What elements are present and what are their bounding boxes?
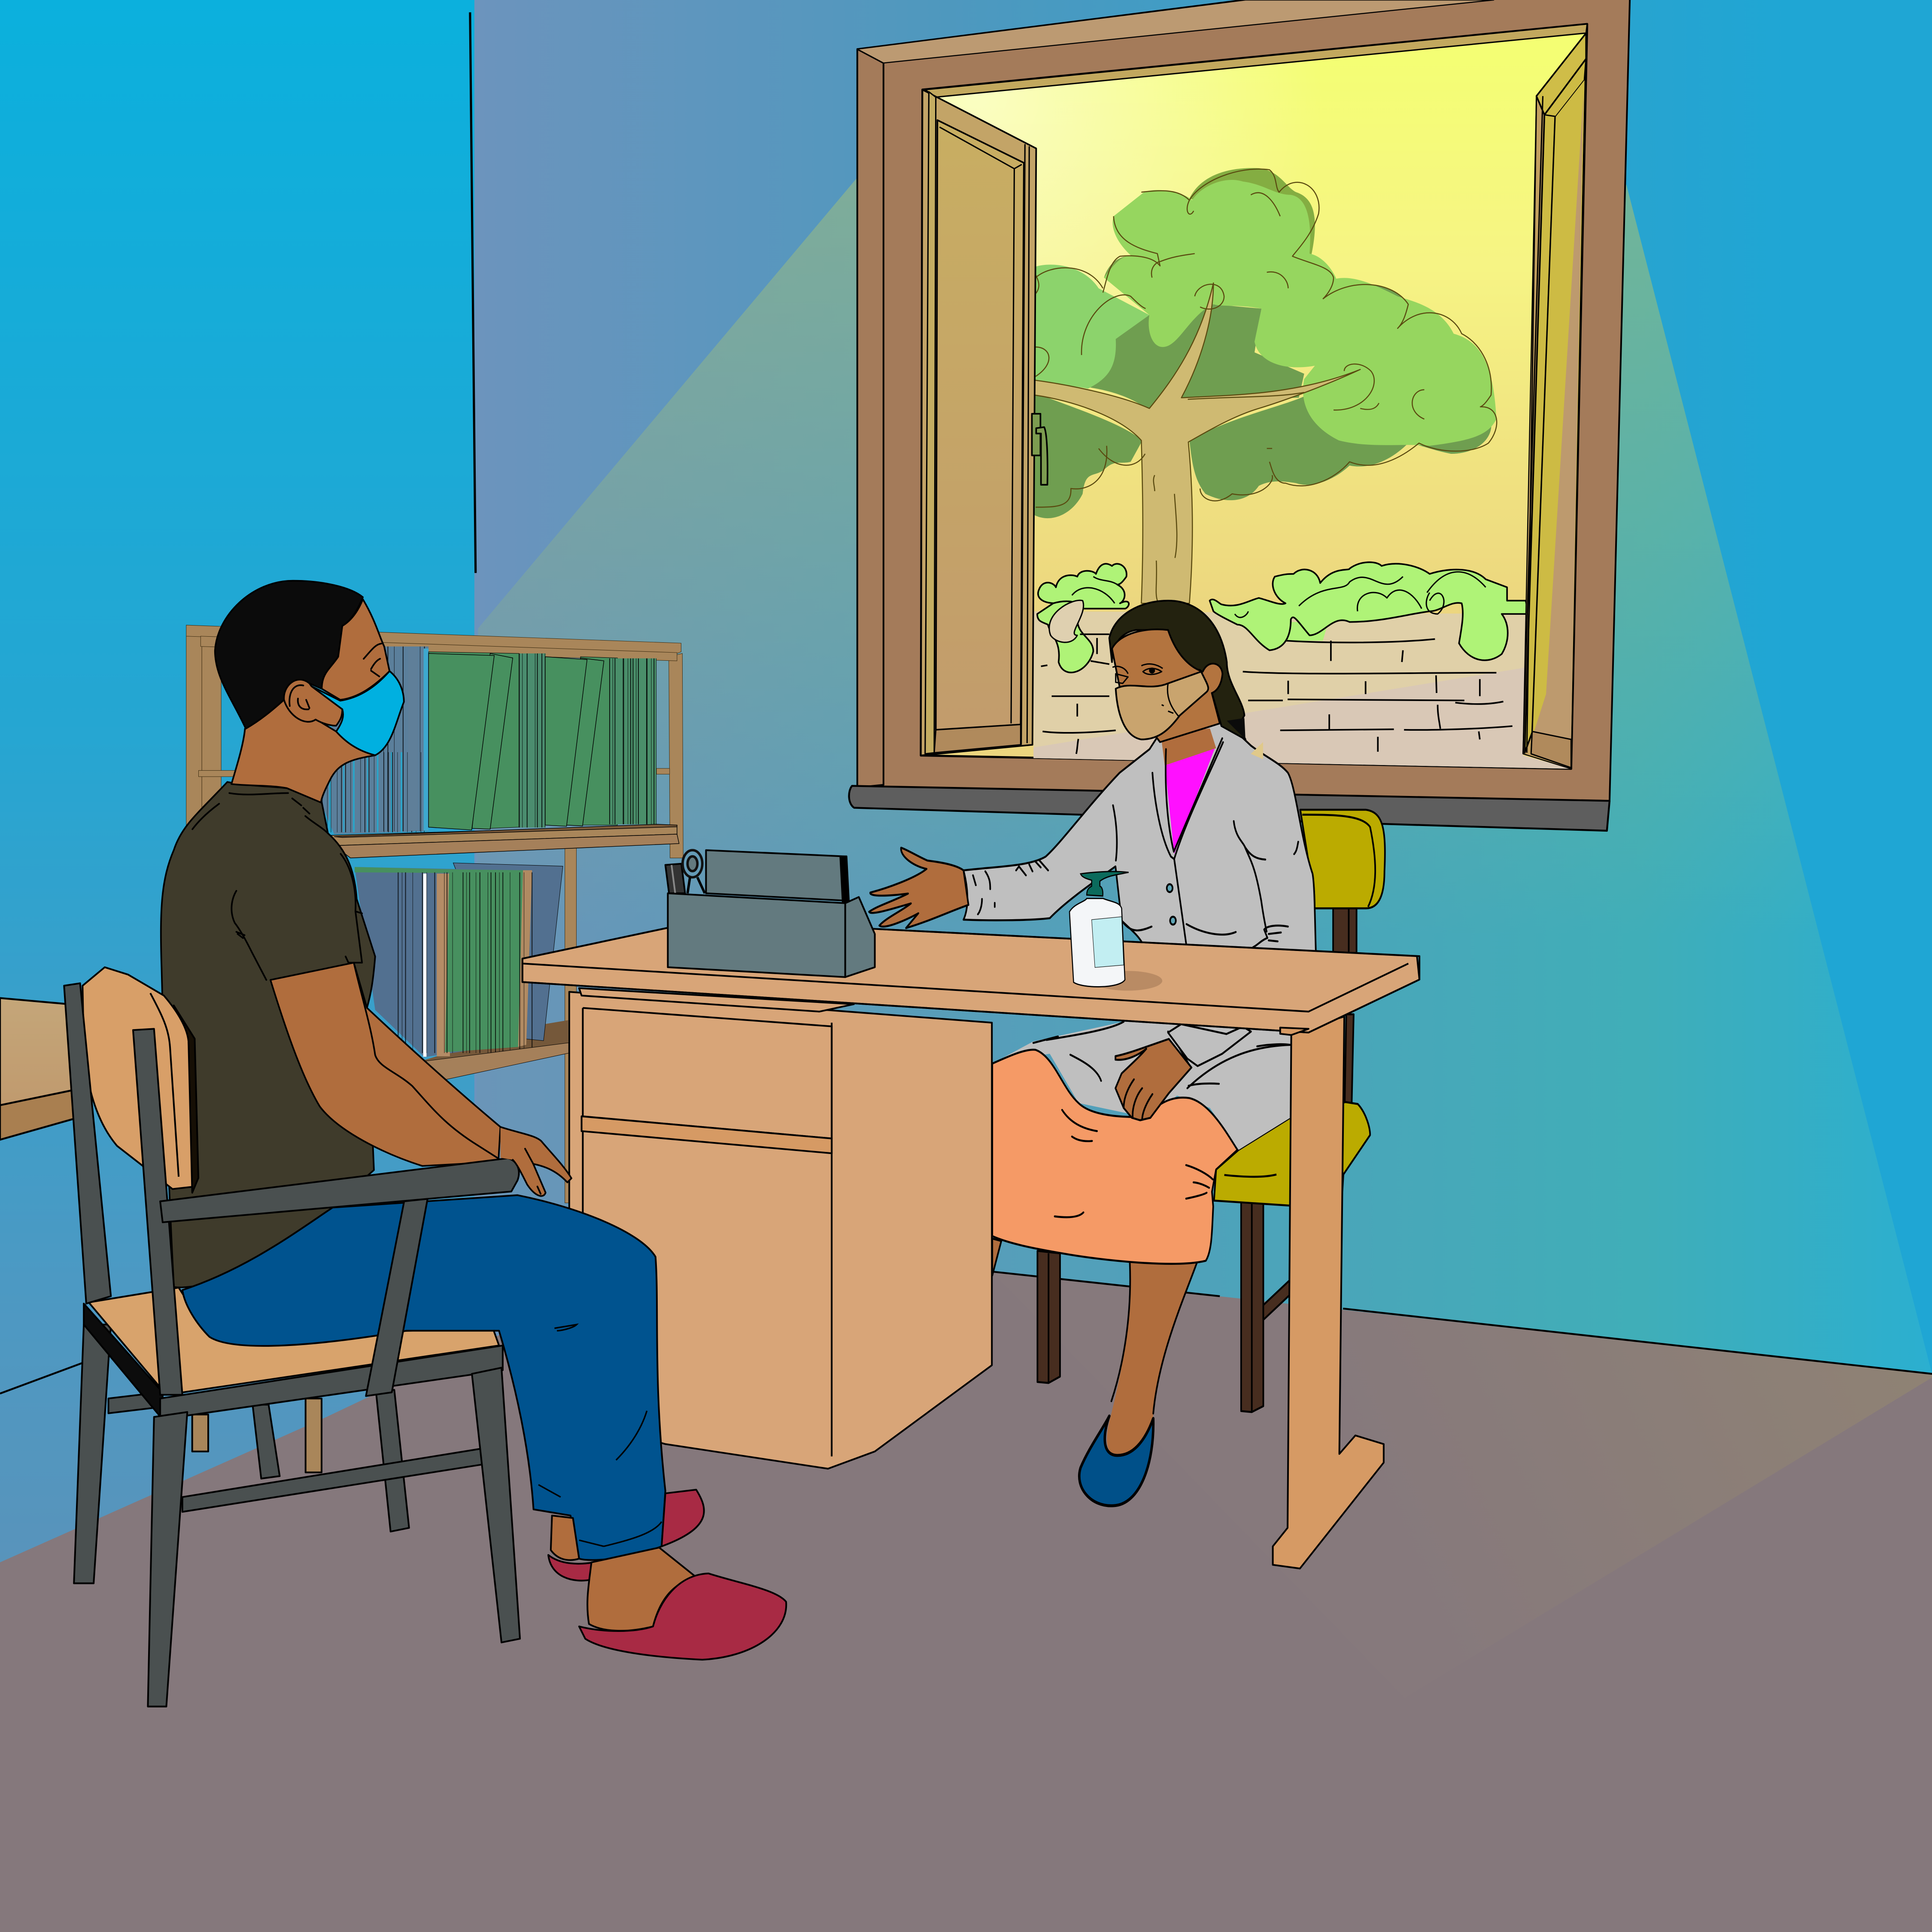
tree shade: [1035, 168, 1492, 518]
far left desk: [0, 998, 86, 1394]
hair: [1109, 601, 1245, 739]
coat buttons: [1167, 884, 1176, 925]
patient arm: [270, 963, 501, 1166]
chair seat: [1214, 1102, 1370, 1209]
neck: [231, 700, 375, 802]
front foot and slipper: [579, 1548, 786, 1660]
floor: [0, 1245, 1932, 1932]
hedge detail: [1072, 572, 1485, 617]
window sill: [849, 786, 1610, 831]
chair back legs: [74, 1324, 409, 1583]
armrest: [160, 1158, 519, 1222]
lower shelf board: [425, 1043, 569, 1080]
upper shelf books: [322, 647, 656, 834]
doctor legs and shoe: [992, 1239, 1197, 1506]
lower shelf books: [355, 863, 568, 1080]
shirt creases: [192, 793, 362, 980]
pens: [665, 864, 685, 893]
patient trousers: [182, 1195, 665, 1560]
seat rail: [160, 1346, 503, 1419]
eye: [364, 644, 381, 677]
left back post: [64, 983, 111, 1303]
chair legs: [1037, 906, 1357, 1412]
view through window: [921, 24, 1587, 769]
coat lapels and details: [973, 738, 1298, 947]
top inner reveal: [925, 24, 1587, 97]
doctor chair: [1037, 810, 1385, 1412]
tree: [1035, 168, 1497, 603]
tree outlines: [1036, 169, 1497, 507]
trunk lines: [1154, 392, 1304, 601]
face: [1112, 629, 1222, 742]
chair back: [1300, 810, 1385, 908]
doctor: [869, 719, 1316, 1506]
trouser creases: [538, 1324, 662, 1546]
scissors: [683, 850, 705, 893]
arm support: [366, 1199, 428, 1396]
upper shelf board: [330, 824, 679, 858]
window handle: [1032, 414, 1048, 485]
patient chair front: [64, 967, 520, 1707]
hedge on wall: [1037, 562, 1528, 672]
desk top: [522, 919, 1419, 1035]
ear: [284, 680, 342, 726]
brick wall courses: [1041, 634, 1513, 754]
coat upper: [963, 719, 1316, 953]
doctor head: [1109, 601, 1263, 759]
skirt: [992, 1050, 1237, 1264]
left window sash: [921, 90, 1048, 756]
doctor extended hand: [869, 848, 969, 928]
chair front legs: [148, 1412, 187, 1707]
patient chair rear parts: [74, 1288, 499, 1583]
right window sash: [1523, 33, 1586, 769]
tree trunk: [1035, 283, 1360, 603]
eyes: [1112, 664, 1163, 683]
doctor mask: [1116, 671, 1208, 739]
seat: [89, 1288, 499, 1395]
window frame: [857, 0, 1630, 801]
hair: [215, 581, 363, 729]
cabinet: [569, 988, 992, 1469]
bookshelf frame: [186, 625, 683, 1203]
back foot and slipper: [548, 1490, 704, 1581]
sanitizer bottle: [1069, 872, 1162, 990]
right back post: [133, 1029, 182, 1395]
desk right leg: [1273, 1017, 1384, 1568]
cross bar: [182, 1448, 487, 1512]
patient upper body: [161, 581, 501, 1288]
bookshelf: [186, 625, 683, 1203]
bottle pump: [1081, 872, 1129, 896]
tree foliage: [1035, 180, 1496, 446]
desk: [522, 919, 1419, 1568]
coat lower lines: [1033, 1022, 1290, 1088]
patient mask: [312, 671, 404, 755]
collar corner: [1251, 742, 1263, 759]
backrest: [82, 967, 194, 1189]
doctor lower hand: [1115, 1039, 1191, 1120]
face: [322, 599, 389, 700]
bookshelf feet: [192, 1398, 322, 1473]
window: [849, 0, 1630, 831]
patient hand: [501, 1127, 571, 1196]
neck: [1160, 729, 1216, 766]
pink top: [1165, 748, 1215, 854]
shirt: [161, 782, 375, 1288]
patient: [161, 581, 786, 1660]
coat lower: [992, 1019, 1294, 1150]
desk organiser box: [665, 850, 875, 977]
